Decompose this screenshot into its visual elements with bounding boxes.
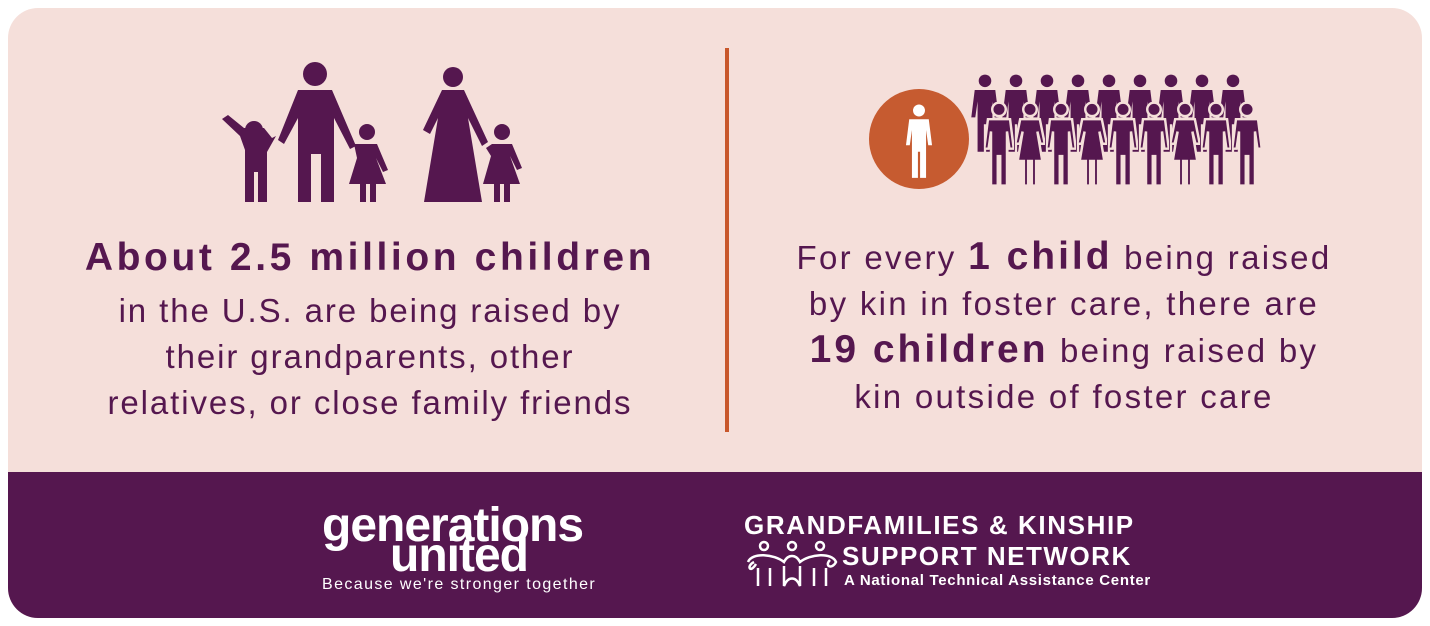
left body text: relatives, or close family friends [108,384,632,421]
girl 2 [483,124,522,202]
icon: crowd of 19 [971,74,1260,184]
left body text [108,292,632,421]
logo: grandfamilies & kinship support network: A National Technical Assistance Center [844,572,1151,589]
boy with raised arm [222,115,276,202]
logo: grandfamilies & kinship support network: GRANDFAMILIES & KINSHIP [744,510,1135,540]
divider [725,48,729,432]
right text: For every 1 child being raised [797,235,1331,278]
left heading: About 2.5 million children [85,236,655,279]
logo: generations united [322,499,596,593]
right text: kin outside of foster care [854,378,1274,415]
icon: orange circle child [869,89,969,189]
left body text: in the U.S. are being raised by [119,292,621,329]
right text: by kin in foster care, there are [809,285,1319,322]
icon: three linked figures [746,540,838,586]
logo: grandfamilies & kinship support network [744,510,1151,589]
left body text: their grandparents, other [166,338,574,375]
girl 1 [349,124,388,202]
right text [797,235,1331,415]
logo: generations united: generations [322,499,583,552]
logo: generations united: united [390,529,528,582]
right text: 19 children being raised by [810,328,1318,371]
woman [423,67,488,202]
icon: family [222,62,522,202]
logo: generations united: Because we're stronger together [322,576,596,593]
logo: grandfamilies & kinship support network: SUPPORT NETWORK [842,541,1132,571]
man [278,62,356,202]
footer band [8,472,1422,618]
